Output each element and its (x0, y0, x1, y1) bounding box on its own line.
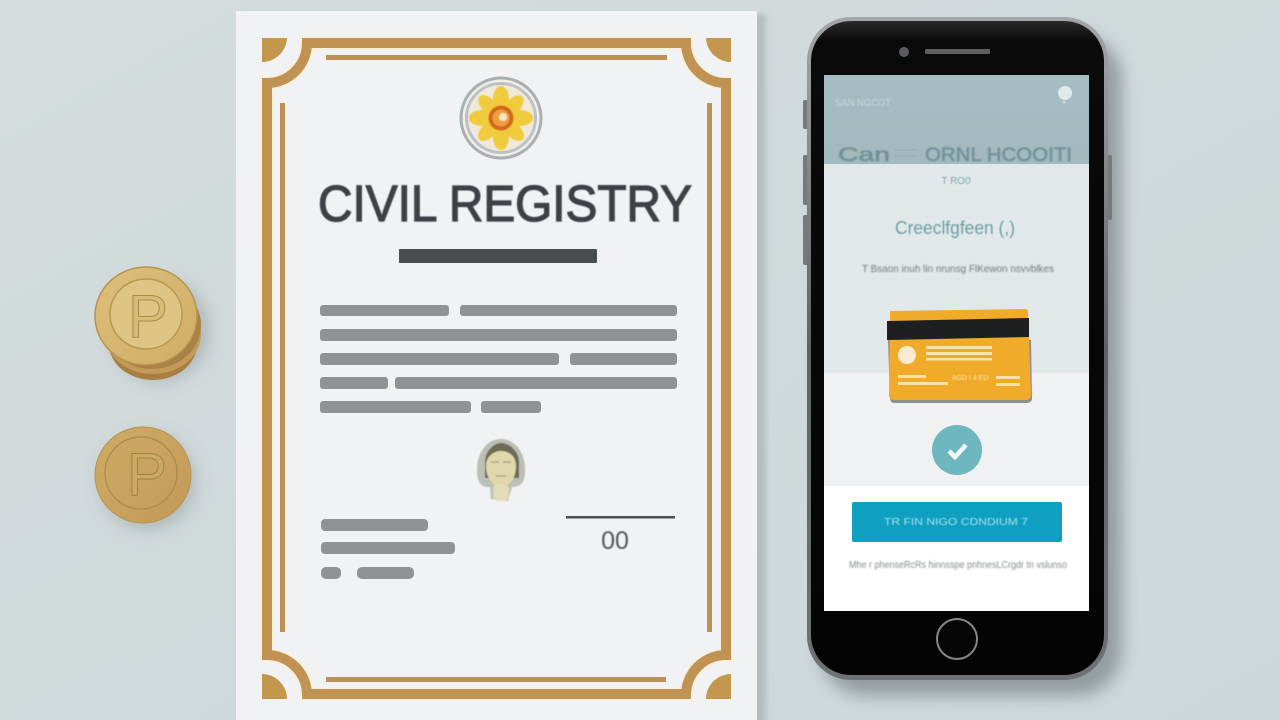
pay button (852, 502, 1062, 542)
small label: T RO0 (941, 176, 971, 187)
panel: coins (95, 267, 210, 530)
icon: check circle (932, 425, 982, 475)
signature label: 00 (601, 527, 629, 555)
icon: coin stack (95, 267, 210, 382)
home button (937, 619, 977, 659)
app header: SAN NGCOT (835, 98, 891, 109)
icon: seal (461, 78, 541, 158)
body text lines (320, 305, 677, 413)
icon: single coin (95, 427, 196, 530)
ornamental border (262, 38, 731, 699)
app header (824, 75, 1089, 166)
icon: payment card: AGD I 4 ED (952, 375, 988, 382)
signature line (566, 516, 675, 518)
phone body (807, 17, 1108, 680)
icon: coin stack: P (128, 283, 168, 350)
panel: civil registry certificate (236, 11, 766, 720)
amount heading: Creeclfgfeen (,) (895, 218, 1015, 238)
footer note: Mhe r phenseRcRs hinnsspe pnhnesLCrgdr tn vslunso (849, 560, 1067, 571)
icon: header badge (1058, 86, 1072, 104)
icon: payment card (887, 309, 1032, 403)
title: CIVIL REGISTRY (318, 175, 692, 232)
screen (824, 75, 1089, 611)
signature block text lines (321, 519, 455, 579)
panel: smartphone (803, 17, 1122, 696)
icon: portrait (477, 439, 525, 501)
camera and speaker (899, 47, 990, 57)
app header: Can (838, 145, 890, 166)
description: T Bsaon inuh lin nrunsg FlKewon nsvvblkes (862, 264, 1054, 275)
side buttons (803, 100, 1112, 265)
subtitle bar (399, 249, 597, 263)
icon: single coin: P (127, 441, 167, 508)
pay button: TR FIN NIGO CDNDIUM 7 (884, 516, 1028, 528)
app header: ORNL HCOOITI (925, 145, 1072, 166)
